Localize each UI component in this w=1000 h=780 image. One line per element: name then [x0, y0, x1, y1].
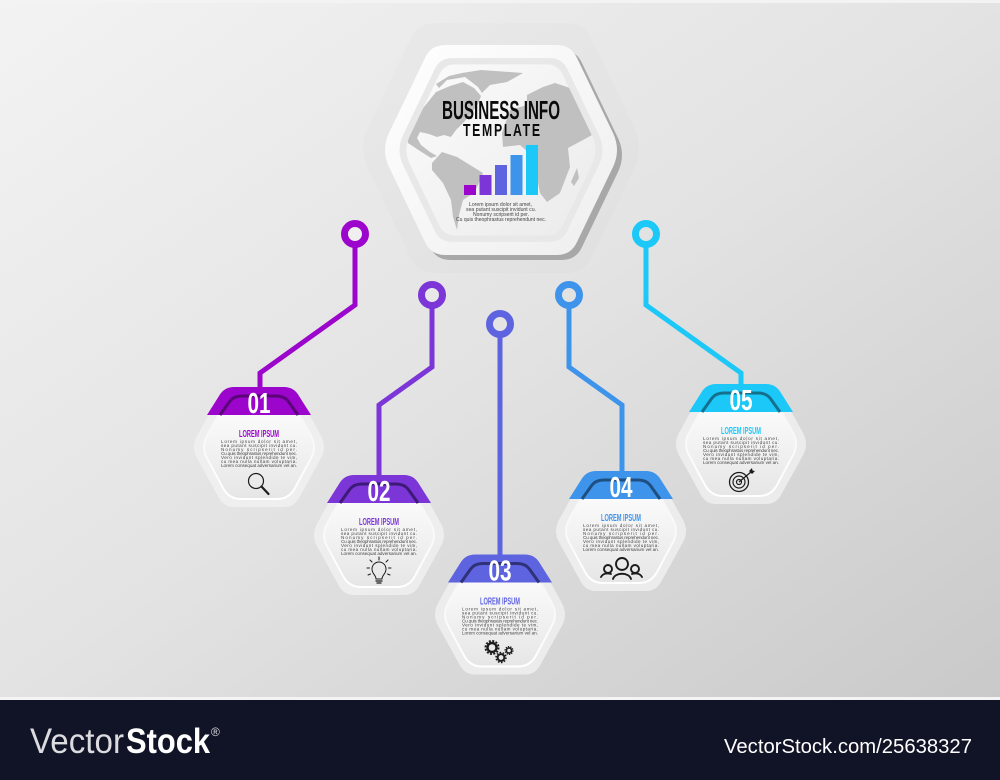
text block 02: Lorem ipsum dolor sit amet, [341, 527, 417, 532]
panel: card 02 [314, 475, 444, 595]
number 04: 04 [610, 472, 632, 504]
text block 03: Vero invidunt splendide te vim, [462, 622, 538, 628]
text block 03 [462, 606, 538, 636]
main description: Cu quis theophrastus reprehendunt nec. [456, 217, 546, 223]
title: BUSINESS INFO [442, 97, 560, 125]
title [442, 97, 560, 141]
connector 04 [558, 284, 622, 476]
text block 05 [703, 436, 779, 465]
heading 03: LOREM IPSUM [480, 596, 520, 608]
text block 04: Cu quis theophrastus reprehendunt nec. [583, 535, 659, 540]
panel: main hexagon [385, 45, 622, 260]
heading 01: LOREM IPSUM [239, 429, 279, 440]
number 03: 03 [488, 556, 512, 588]
text block 01: Lorem ipsum dolor sit amet, [221, 439, 297, 444]
icon: gears [485, 641, 513, 662]
heading 02: LOREM IPSUM [359, 517, 399, 528]
number 02: 02 [368, 476, 390, 508]
panel: card 05 [676, 384, 806, 504]
connector 01 [260, 224, 366, 392]
icon: target [730, 468, 755, 492]
text block 03: Lorem ipsum dolor sit amet, [462, 606, 538, 611]
text block 02 [341, 527, 417, 556]
text block 03: cu mea nulla nullam voluptaria. [462, 627, 538, 632]
panel: card 04 [556, 471, 686, 591]
top light strip [0, 0, 1000, 3]
text block 03: sea putant suscipit invidunt cu. [462, 610, 538, 615]
number 01: 01 [248, 388, 270, 420]
text block 02: Lorem consequat adversarium vel an. [341, 551, 417, 556]
text block 04 [583, 523, 659, 552]
VectorStock logo [30, 722, 220, 761]
text block 05: Lorem consequat adversarium vel an. [703, 460, 779, 465]
text block 02: cu mea nulla nullam voluptaria. [341, 547, 417, 552]
text block 04: Lorem ipsum dolor sit amet, [583, 523, 659, 528]
VectorStock logo: Stock [126, 722, 210, 761]
text block 02: Cu quis theophrastus reprehendunt nec. [341, 539, 417, 544]
connector 03 [490, 314, 510, 560]
text block 02: Vero invidunt splendide te vim, [341, 543, 417, 548]
text block 05: sea putant suscipit invidunt cu. [703, 440, 779, 445]
text block 03: Cu quis theophrastus reprehendunt nec. [462, 618, 538, 623]
connector 02 [379, 284, 442, 480]
panel: card 01 [194, 387, 324, 507]
text block 01: sea putant suscipit invidunt cu. [221, 443, 297, 448]
text block 02: sea putant suscipit invidunt cu. [341, 531, 417, 536]
VectorStock logo: Vector [30, 722, 124, 761]
text block 01: Vero invidunt splendide te vim, [221, 455, 297, 460]
text block 04: sea putant suscipit invidunt cu. [583, 527, 659, 532]
bar chart [464, 145, 538, 195]
title: TEMPLATE [463, 121, 540, 141]
text block 01: Nonumy scripserit id per. [221, 447, 297, 452]
text block 01: cu mea nulla nullam voluptaria. [221, 459, 297, 464]
heading 05: LOREM IPSUM [721, 426, 761, 437]
text block 01 [221, 439, 297, 468]
world map [407, 70, 592, 230]
text block 01: Cu quis theophrastus reprehendunt nec. [221, 451, 297, 456]
main description: Nonumy scripserit id per. [473, 212, 529, 218]
text block 03: Nonumy scripserit id per. [462, 614, 538, 619]
text block 04: Nonumy scripserit id per. [583, 531, 659, 536]
icon: magnifier [248, 474, 268, 494]
text block 05: cu mea nulla nullam voluptaria. [703, 456, 779, 461]
heading 04: LOREM IPSUM [601, 513, 641, 524]
main description: Lorem ipsum dolor sit amet, [469, 202, 532, 208]
text block 05: Vero invidunt splendide te vim, [703, 452, 779, 457]
connector 05 [636, 224, 741, 389]
text block 04: cu mea nulla nullam voluptaria. [583, 543, 659, 548]
text block 05: Nonumy scripserit id per. [703, 444, 779, 449]
number 05: 05 [730, 385, 752, 417]
text block 01: Lorem consequat adversarium vel an. [221, 463, 297, 468]
text block 02: Nonumy scripserit id per. [341, 535, 417, 540]
icon: light bulb [367, 557, 391, 583]
text block 04: Vero invidunt splendide te vim, [583, 539, 659, 544]
footer bar [0, 700, 1000, 780]
main description [456, 202, 546, 223]
stock number: VectorStock.com/25638327 [724, 736, 972, 758]
main description: sea putant suscipit invidunt cu. [466, 207, 536, 213]
text block 05: Lorem ipsum dolor sit amet, [703, 436, 779, 441]
panel: card 03 [435, 554, 565, 674]
bottom white strip [0, 697, 1000, 700]
text block 03: Lorem consequat adversarium vel an. [462, 631, 538, 636]
VectorStock logo: ® [211, 725, 220, 739]
text block 04: Lorem consequat adversarium vel an. [583, 547, 659, 552]
text block 05: Cu quis theophrastus reprehendunt nec. [703, 448, 779, 453]
icon: people [601, 558, 642, 579]
